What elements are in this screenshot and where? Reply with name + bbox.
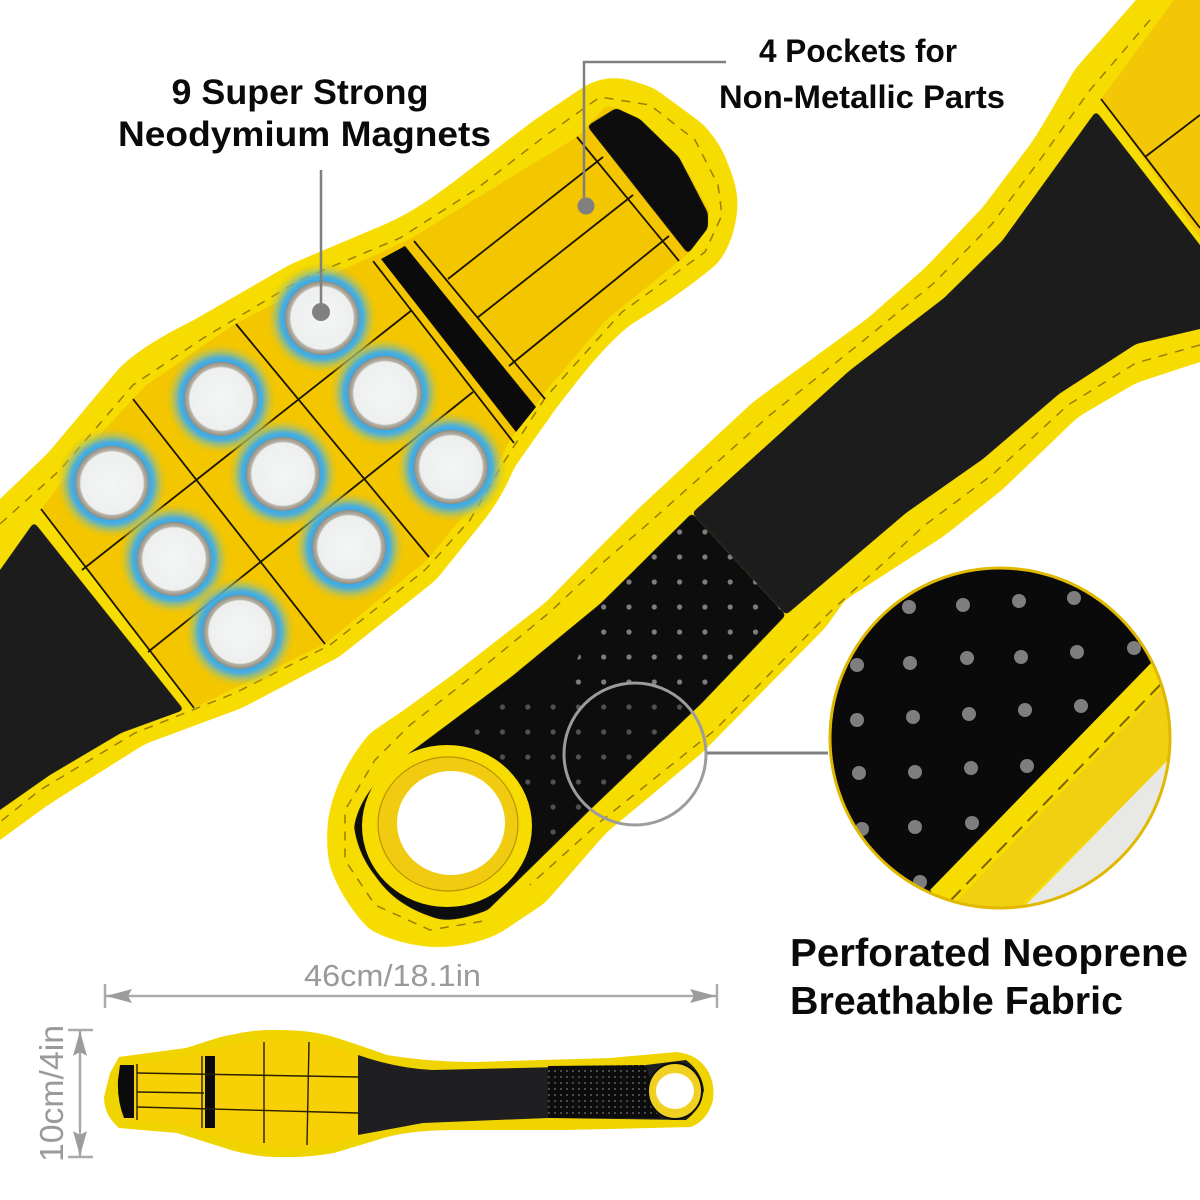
small black end	[118, 1065, 134, 1118]
small perforations	[548, 1065, 660, 1118]
heading: perforated fabric: Breathable Fabric	[790, 980, 1123, 1023]
lens black background	[832, 570, 1151, 892]
black elastic panel	[0, 522, 184, 840]
fabric panel	[41, 106, 710, 708]
yellow trim	[327, 0, 1200, 947]
magnet glows	[56, 262, 507, 688]
heading: pockets: 4 Pockets for	[759, 33, 957, 69]
height dimension: 10cm/4in	[33, 1025, 70, 1162]
seam lines	[41, 137, 679, 708]
heading: magnets: Neodymium Magnets	[118, 115, 491, 154]
width dimension	[105, 958, 717, 1008]
fabric seam lines	[1101, 99, 1200, 228]
magnified fabric lens	[832, 570, 1168, 906]
heading: perforated fabric	[790, 932, 1188, 1023]
lens fabric band	[955, 687, 1180, 910]
inner ring seam	[378, 757, 518, 891]
hole	[397, 771, 505, 875]
stitching	[345, 20, 1200, 930]
black elastic panel	[692, 111, 1200, 615]
small loop ring	[648, 1063, 702, 1119]
perforation dots: faded lower	[470, 677, 702, 860]
small hole	[656, 1073, 694, 1109]
yellow trim	[0, 78, 738, 870]
perforation dots: upper	[560, 513, 786, 703]
end loop ring	[362, 745, 532, 907]
lens border	[830, 568, 1170, 908]
width dimension: 46cm/18.1in	[304, 958, 481, 993]
lens perforations	[850, 591, 1141, 889]
stitching	[0, 97, 722, 822]
left wristband: magnet side	[0, 78, 738, 870]
heading: pockets	[719, 33, 1005, 115]
callout: small magnifier ring	[564, 683, 706, 825]
small perforated panel	[548, 1065, 660, 1118]
small black panel	[358, 1055, 704, 1135]
lens white corner	[1026, 761, 1167, 904]
small black bar	[205, 1056, 215, 1128]
heading: magnets	[118, 73, 491, 154]
heading: magnets: 9 Super Strong	[172, 73, 428, 112]
small band outline	[104, 1030, 714, 1157]
lens yellow trim band	[930, 663, 1175, 915]
lens stitching	[951, 685, 1160, 900]
fabric corner	[1101, 0, 1200, 237]
heading: perforated fabric: Perforated Neoprene	[790, 932, 1188, 975]
black end strip	[587, 108, 708, 254]
height dimension	[33, 1025, 93, 1162]
heading: pockets: Non-Metallic Parts	[719, 79, 1005, 115]
leader: pockets	[578, 62, 726, 214]
leader: magnets	[312, 170, 330, 321]
nine magnets	[75, 281, 488, 669]
small full wristband	[104, 1030, 714, 1157]
callout: connector line	[707, 752, 828, 754]
right strap: perforated side	[327, 0, 1200, 947]
small fabric panel	[124, 1040, 358, 1148]
black bar	[381, 246, 536, 432]
black perforated panel	[354, 513, 786, 920]
small seam lines	[137, 1042, 358, 1145]
